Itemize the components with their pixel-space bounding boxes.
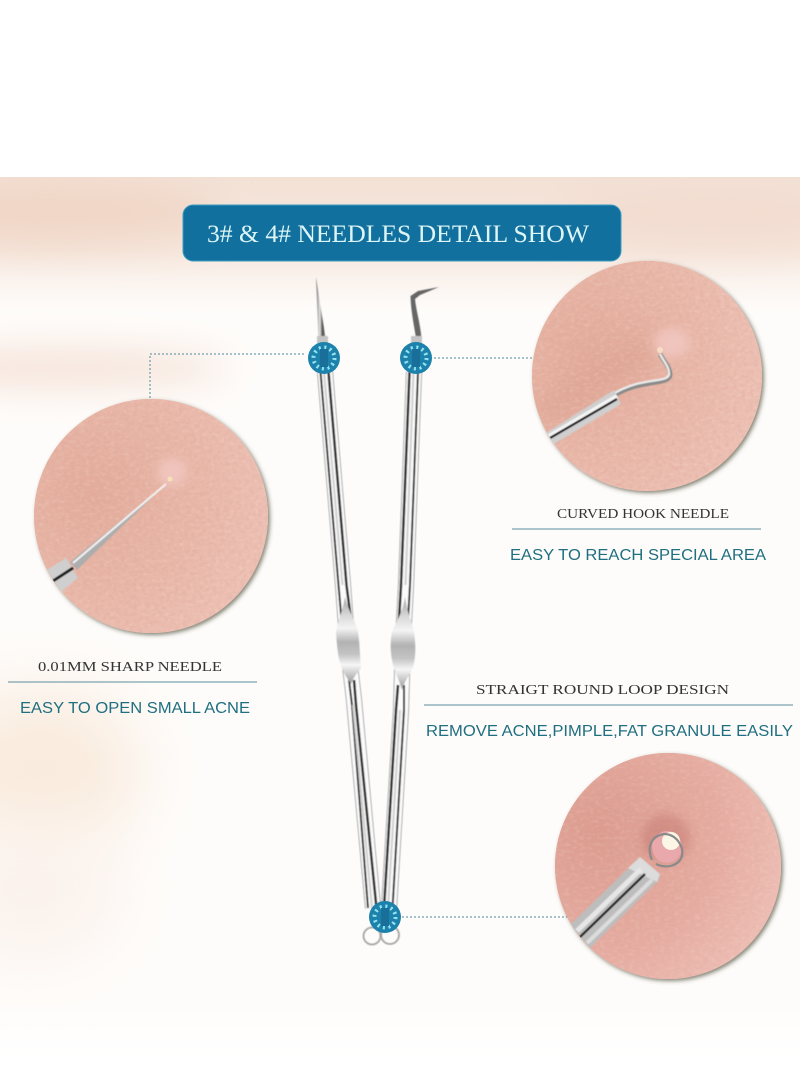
- panel: round loop close-up: [553, 751, 783, 981]
- caption: curved hook needle: EASY TO REACH SPECIAL AREA: [510, 547, 766, 564]
- blue marker: left needle: [308, 342, 340, 374]
- loop: [381, 926, 399, 944]
- grip bulge: [391, 597, 415, 690]
- needle probe: [47, 484, 166, 592]
- caption: round loop: REMOVE ACNE,PIMPLE,FAT GRANULE EASILY: [426, 723, 793, 740]
- caption: round loop: [424, 683, 793, 740]
- title banner: [183, 205, 621, 261]
- needle tip: [316, 277, 326, 338]
- blue marker: loop end: [369, 901, 401, 933]
- caption: sharp needle: EASY TO OPEN SMALL ACNE: [20, 700, 250, 717]
- panel: curved hook close-up: [530, 259, 766, 493]
- panel: sharp needle close-up: [32, 397, 272, 635]
- title banner: 3# & 4# NEEDLES DETAIL SHOW: [207, 219, 590, 248]
- loop tool shaft: [570, 857, 660, 948]
- hook tip: [410, 287, 439, 338]
- caption: curved hook needle: CURVED HOOK NEEDLE: [557, 506, 729, 521]
- hook probe: [546, 354, 670, 445]
- loop: [364, 928, 380, 944]
- caption: sharp needle: [8, 660, 257, 717]
- tool: straight needle with round loop: [316, 277, 380, 944]
- dotted leader lines: [150, 354, 568, 917]
- loop on pimple: [652, 831, 682, 863]
- caption: curved hook needle: [510, 506, 766, 564]
- caption: round loop: STRAIGT ROUND LOOP DESIGN: [476, 683, 729, 698]
- caption: sharp needle: 0.01MM SHARP NEEDLE: [38, 660, 222, 675]
- grip bulge: [336, 597, 361, 684]
- blue marker: hook needle: [400, 342, 432, 374]
- tool: curved hook needle with round loop: [381, 287, 439, 944]
